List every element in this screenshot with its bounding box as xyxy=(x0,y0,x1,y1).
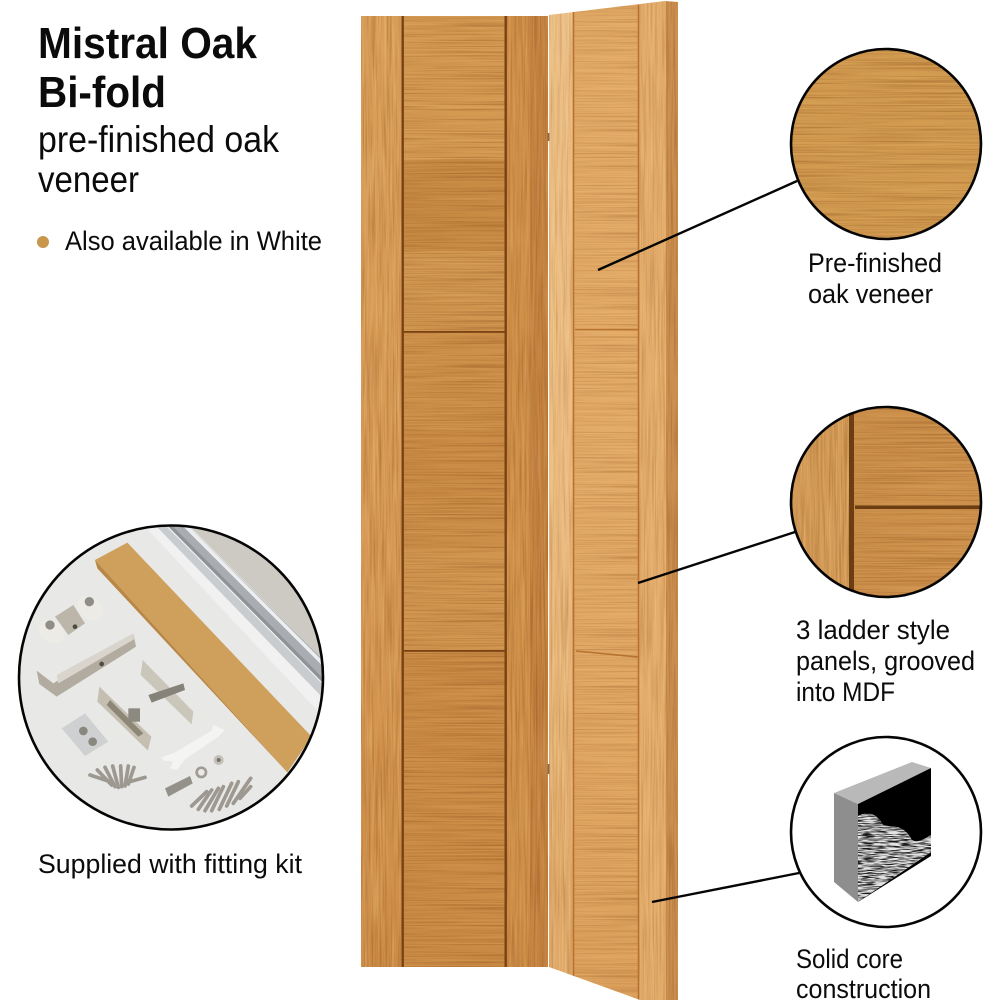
core: top face xyxy=(834,762,931,804)
veneer caption: Pre-finished xyxy=(808,248,942,278)
leader line: core xyxy=(652,873,799,902)
leader line: veneer xyxy=(598,181,797,270)
ladder panels xyxy=(403,17,505,967)
door edge xyxy=(666,0,678,1000)
door: left leaf xyxy=(361,16,548,967)
door: right leaf xyxy=(549,0,678,1000)
veneer caption xyxy=(808,248,942,309)
bullet: also available in white: Also available in White xyxy=(65,226,322,256)
fitting kit circle xyxy=(19,523,330,830)
kit: bolt, washer and nut xyxy=(165,755,224,797)
panels caption: 3 ladder style xyxy=(796,615,950,645)
grooves xyxy=(574,5,638,1000)
kit: channel bracket xyxy=(37,633,136,697)
circle: oak veneer detail xyxy=(791,49,981,239)
leader line: panels xyxy=(638,532,795,583)
kit: bracket with screws xyxy=(62,713,108,756)
core caption: Solid core xyxy=(796,944,903,974)
title xyxy=(38,19,257,117)
kit: background wall xyxy=(192,528,320,657)
ladder panels xyxy=(574,0,639,1000)
circle: solid core cross-section xyxy=(791,737,981,927)
kit: pivot plate 2 xyxy=(97,687,151,751)
kit: screws left xyxy=(90,766,145,787)
circle: grooved panel detail xyxy=(791,407,981,597)
kit: roller xyxy=(45,597,94,635)
outer stile xyxy=(639,0,666,1000)
kit caption: Supplied with fitting kit xyxy=(38,849,303,879)
core: side face xyxy=(834,793,858,902)
right stile xyxy=(506,16,548,967)
panels caption xyxy=(796,615,975,707)
kit: oak strip xyxy=(95,543,312,772)
subtitle: pre-finished oak xyxy=(38,119,279,160)
kit: spanner xyxy=(161,725,225,770)
kit: aluminium track xyxy=(145,527,325,712)
left stile xyxy=(361,16,402,967)
core caption xyxy=(796,944,931,1000)
panels caption: panels, grooved xyxy=(796,646,975,676)
core: MDF texture xyxy=(858,810,932,904)
subtitle xyxy=(38,119,279,200)
veneer caption: oak veneer xyxy=(808,279,933,309)
kit: screws right xyxy=(192,778,251,811)
subtitle: veneer xyxy=(38,159,139,200)
panels caption: into MDF xyxy=(796,677,895,707)
hinge stile xyxy=(549,0,574,1000)
hinges xyxy=(548,133,550,774)
title: Bi-fold xyxy=(38,68,166,117)
title: Mistral Oak xyxy=(38,19,257,68)
kit: pivot plate 1 xyxy=(141,660,193,724)
grooves xyxy=(402,16,507,967)
core: black profile xyxy=(858,768,931,902)
